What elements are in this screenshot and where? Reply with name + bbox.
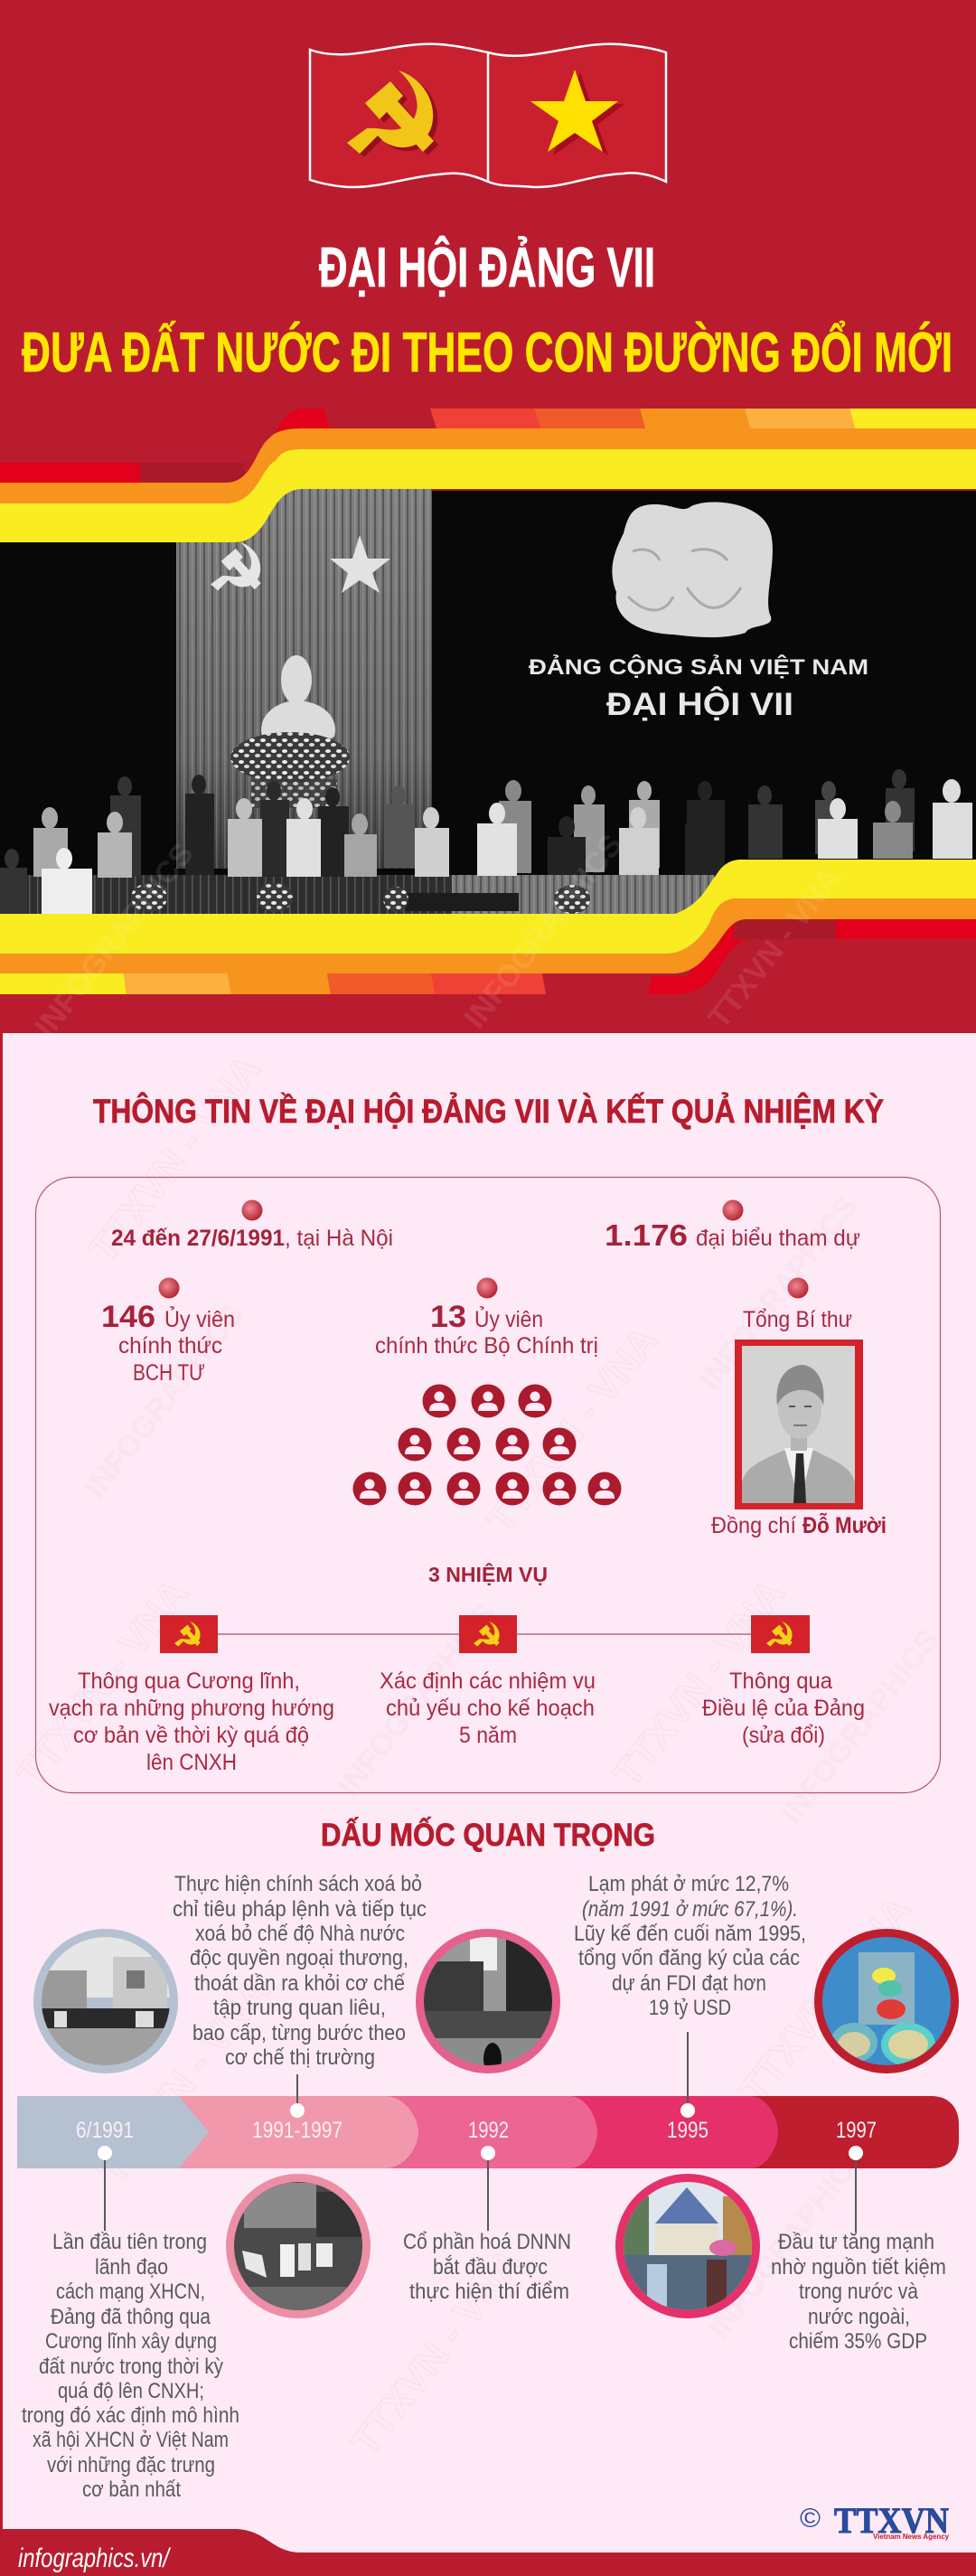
hall text: ĐẢNG CỘNG SẢN VIỆT NAM: [529, 653, 868, 680]
icon: star on curtain: [330, 535, 390, 593]
icon: hammer and sickle: [347, 71, 438, 157]
watermarks infographics: INFOGRAPHICS: [774, 1623, 946, 1830]
pink content background: [3, 1033, 976, 2552]
text: 1995: (năm 1991 ở mức 67,1%).: [582, 1897, 798, 1922]
general secretary: [711, 1278, 887, 1538]
watermarks infographics: INFOGRAPHICS: [331, 1596, 503, 1803]
fact: delegates: [605, 1200, 860, 1252]
text: 6/1991: lãnh đạo: [95, 2255, 168, 2280]
curtain: [176, 489, 432, 869]
task 1 text: vạch ra những phương hướng: [49, 1696, 334, 1721]
flag emblem: [310, 44, 666, 187]
text: 1995: tổng vốn đăng ký của các: [578, 1946, 800, 1970]
photo circle: street with motorbikes: [615, 2174, 760, 2318]
task 2 text: Xác định các nhiệm vụ: [380, 1669, 596, 1694]
text: 6/1991: cơ bản nhất: [82, 2477, 181, 2502]
timeline labels: 1995: [667, 2118, 709, 2143]
text: 1992: Cổ phần hoá DNNN: [403, 2230, 571, 2254]
task 3 text: [702, 1669, 865, 1748]
watermarks: TTXVN - VNA: [605, 1571, 793, 1795]
timeline labels: 1997: [836, 2118, 877, 2143]
photo circle: factory workers: [814, 1929, 959, 2073]
hall text: ĐẠI HỘI VII: [606, 686, 793, 722]
icon: party flag 1: [160, 1615, 218, 1653]
fact: central committee: chính thức: [118, 1333, 222, 1359]
icon: hammer sickle on curtain: [211, 542, 261, 590]
fact: date and place: , tại Hà Nội: [285, 1226, 393, 1251]
relief portrait: [612, 502, 773, 637]
watermarks: TTXVN - VNA: [731, 1887, 920, 2111]
icons: 13 politburo members: [352, 1385, 622, 1506]
lower ribbon over photo bottom: [0, 860, 976, 994]
text: 6/1991: [22, 2230, 239, 2502]
logo: TTXVN: ©: [800, 2504, 821, 2534]
text: 6/1991: Lần đầu tiên trong: [52, 2230, 207, 2254]
text: 1991-1997: tập trung quan liêu,: [213, 1996, 386, 2020]
task 3 text: (sửa đổi): [742, 1723, 825, 1748]
title line 1: ĐẠI HỘI ĐẢNG VII: [319, 237, 655, 299]
fact: central committee: BCH TƯ: [133, 1360, 205, 1386]
photo circle: old quarter: [416, 1929, 560, 2075]
fact: date and place: 24 đến 27/6/1991: [111, 1226, 285, 1251]
logo: TTXVN: Vietnam News Agency: [873, 2533, 950, 2541]
connector line: [218, 1633, 751, 1635]
logo: TTXVN: TTXVN: [834, 2500, 949, 2541]
timeline labels: 1991-1997: [252, 2118, 343, 2143]
task 1 text: [49, 1669, 334, 1775]
delegates standing: [0, 769, 972, 914]
text: 1995: Lũy kế đến cuối năm 1995,: [574, 1922, 806, 1946]
text: 6/1991: cách mạng XHCN,: [56, 2280, 205, 2304]
text: 1997: [771, 2230, 946, 2354]
task 2 text: chủ yếu cho kế hoạch: [386, 1696, 595, 1721]
task 1 text: lên CNXH: [146, 1750, 237, 1775]
fact: delegates: đại biểu tham dự: [696, 1226, 860, 1251]
text: 6/1991: trong đó xác định mô hình: [22, 2403, 239, 2428]
text: 1991-1997: xoá bỏ chế độ Nhà nước: [195, 1922, 405, 1946]
timeline bar: [17, 2096, 959, 2168]
middle ribbon over photo top: [0, 428, 976, 542]
watermarks infographics: [78, 1189, 946, 2346]
text: 1992: thực hiện thí điểm: [409, 2280, 569, 2304]
timeline connectors and dots: [98, 2032, 863, 2233]
text: 6/1991: đất nước trong thời kỳ: [39, 2355, 223, 2379]
photo: congress hall: [0, 489, 976, 914]
task 1 text: cơ bản về thời kỳ quá độ: [73, 1723, 309, 1748]
task 2 text: 5 năm: [459, 1723, 517, 1748]
watermarks: [8, 1047, 920, 2464]
text: 1997: nước ngoài,: [808, 2305, 910, 2329]
text: 1997: Đầu tư tăng mạnh: [778, 2230, 934, 2254]
panel: congress facts: [36, 1177, 940, 1793]
fact: central committee: Ủy viên: [164, 1305, 235, 1332]
timeline labels: 6/1991: [76, 2118, 134, 2143]
watermarks: TTXVN - VNA: [478, 1318, 667, 1542]
text: 1995: Lạm phát ở mức 12,7%: [588, 1872, 789, 1896]
text: 1991-1997: Thực hiện chính sách xoá bỏ: [174, 1872, 422, 1896]
watermarks infographics: INFOGRAPHICS: [692, 1189, 865, 1396]
watermarks: TTXVN - VNA: [80, 1047, 269, 1271]
text: 1997: trong nước và: [799, 2280, 919, 2304]
text: 1991-1997: cơ chế thị trường: [225, 2045, 375, 2070]
timeline labels: 1992: [468, 2118, 509, 2143]
text: 1997: nhờ nguồn tiết kiệm: [771, 2255, 946, 2280]
task 2 text: [380, 1669, 596, 1748]
fact: date and place: [111, 1200, 393, 1251]
fact: delegates: 1.176: [605, 1218, 688, 1252]
text: 1991-1997: [173, 1872, 427, 2070]
flowers: [230, 732, 350, 808]
fact: central committee: [101, 1278, 235, 1386]
text: 1992: bắt đầu được: [433, 2255, 548, 2280]
fact: politburo: Ủy viên: [474, 1305, 543, 1332]
icon: yellow star: [530, 70, 624, 155]
stage front: [0, 875, 976, 914]
fact: central committee: 146: [101, 1300, 155, 1334]
portrait: Do Muoi: [735, 1340, 863, 1509]
watermarks on red: INFOGRAPHICS: [28, 837, 201, 1044]
section heading: milestones: DẤU MỐC QUAN TRỌNG: [321, 1817, 655, 1853]
text: 1991-1997: thoát dần ra khỏi cơ chế: [194, 1971, 406, 1996]
watermarks: TTXVN - VNA: [89, 1969, 278, 2193]
fact: politburo: chính thức Bộ Chính trị: [375, 1333, 598, 1359]
timeline labels: [76, 2118, 877, 2143]
watermarks on red: [28, 828, 848, 1044]
task 3 text: Điều lệ của Đảng: [702, 1696, 865, 1721]
task 1 text: Thông qua Cương lĩnh,: [78, 1669, 300, 1694]
text: 1995: [574, 1872, 806, 2020]
text: 1991-1997: bao cấp, từng bước theo: [192, 2021, 406, 2045]
icon: party flag 3: [751, 1615, 810, 1653]
fact: politburo: 13: [430, 1300, 466, 1334]
fact: politburo: [375, 1278, 598, 1359]
top coloured ribbon stripes: [0, 409, 976, 488]
text: 6/1991: quá độ lên CNXH;: [58, 2379, 204, 2403]
general secretary: Tổng Bí thư: [743, 1307, 852, 1332]
text: 1995: 19 tỷ USD: [649, 1996, 731, 2020]
watermarks: TTXVN - VNA: [8, 1571, 197, 1795]
general secretary: Đỗ Mười: [802, 1511, 887, 1538]
watermarks infographics: INFOGRAPHICS: [701, 2139, 874, 2346]
text: 1991-1997: độc quyền ngoại thương,: [190, 1946, 408, 1970]
general secretary: Đồng chí: [711, 1513, 796, 1538]
subheading: 3 tasks: 3 NHIỆM VỤ: [428, 1562, 548, 1586]
photo circle: old street with cloth: [226, 2174, 371, 2318]
text: 6/1991: xã hội XHCN ở Việt Nam: [33, 2428, 229, 2452]
watermarks infographics: INFOGRAPHICS: [78, 1298, 250, 1505]
text: 1997: chiếm 35% GDP: [789, 2329, 927, 2354]
task 3 text: Thông qua: [729, 1669, 832, 1694]
icon: party flag 2: [459, 1615, 517, 1653]
bust of President Ho Chi Minh: [261, 655, 335, 746]
footer url: infographics.vn/: [18, 2543, 171, 2573]
watermarks on red: TTXVN - VNA: [701, 861, 848, 1035]
text: 1995: dự án FDI đạt hơn: [612, 1971, 766, 1996]
text: 1991-1997: chỉ tiêu pháp lệnh và tiếp tục: [173, 1897, 427, 1922]
watermarks on red: INFOGRAPHICS: [457, 828, 630, 1035]
photo circle: street 1991: [33, 1929, 178, 2079]
text: 6/1991: Cương lĩnh xây dựng: [45, 2329, 217, 2354]
watermarks: TTXVN - VNA: [343, 2240, 531, 2464]
text: 1992: [403, 2230, 571, 2304]
text: 6/1991: Đảng đã thông qua: [51, 2305, 211, 2329]
text: 6/1991: với những đặc trưng: [47, 2453, 215, 2477]
